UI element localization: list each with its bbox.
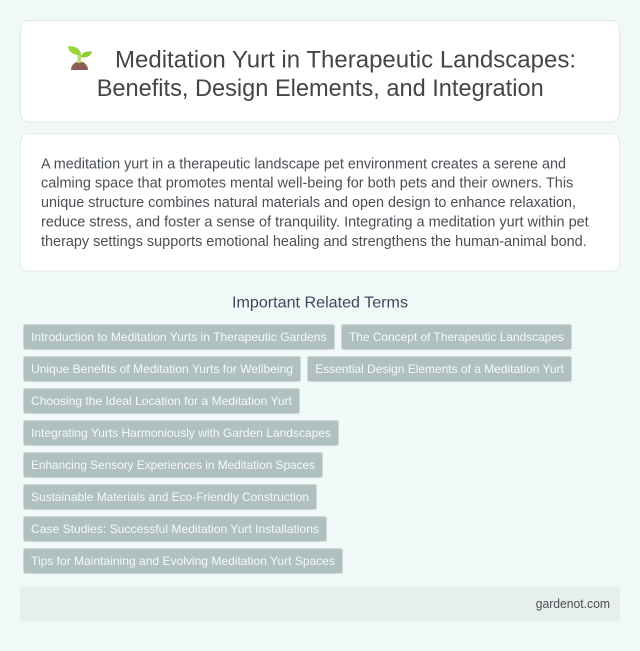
description text: unique structure combines natural materials and open design to enhance relaxation, [41,195,576,211]
title: Benefits, Design Elements, and Integration [97,75,544,102]
tag: benefits [24,356,300,382]
description text: therapy settings supports emotional healing and strengthens the human-animal bond. [41,234,587,250]
tag: introduction: Introduction to Meditation Yurts in Therapeutic Gardens [31,330,326,344]
tag: integrating [24,420,338,446]
tag: tips: Tips for Maintaining and Evolving Meditation Yurt Spaces [31,554,335,568]
description text [41,156,589,250]
title [97,46,576,102]
tag: case studies: Case Studies: Successful Meditation Yurt Installations [31,522,319,536]
tag: concept: The Concept of Therapeutic Landscapes [349,330,564,344]
description text: calming space that promotes mental well-being for both pets and their owners. This [41,176,573,192]
tag: materials: Sustainable Materials and Eco-Friendly Construction [31,490,309,504]
tag: location: Choosing the Ideal Location for a Meditation Yurt [31,394,293,408]
tag: case studies [24,516,326,542]
panel: term tags [24,324,572,574]
tag: sensory [24,452,322,478]
panel: title card [20,20,620,122]
tag: tips [24,548,342,574]
tag: design elements [308,356,572,382]
tag: integrating: Integrating Yurts Harmoniously with Garden Landscapes [31,426,331,440]
tag: sensory: Enhancing Sensory Experiences in Meditation Spaces [31,458,315,472]
tag: design elements: Essential Design Elements of a Meditation Yurt [315,362,564,376]
tag: materials [24,484,316,510]
description text: A meditation yurt in a therapeutic landscape pet environment creates a serene and [41,156,566,172]
icon: seedling [68,46,92,70]
tag: location [24,388,300,414]
footer bar [20,587,620,621]
footer source text: gardenot.com [536,596,610,611]
panel: description card [20,134,620,271]
tag: introduction [24,324,334,350]
tag: concept [342,324,572,350]
heading: important related terms: Important Related Terms [232,294,408,311]
description text: reduce stress, and foster a sense of tranquility. Integrating a meditation yurt within pet [41,215,589,231]
title: Meditation Yurt in Therapeutic Landscapes: [115,46,576,74]
tag: benefits: Unique Benefits of Meditation Yurts for Wellbeing [31,362,293,376]
